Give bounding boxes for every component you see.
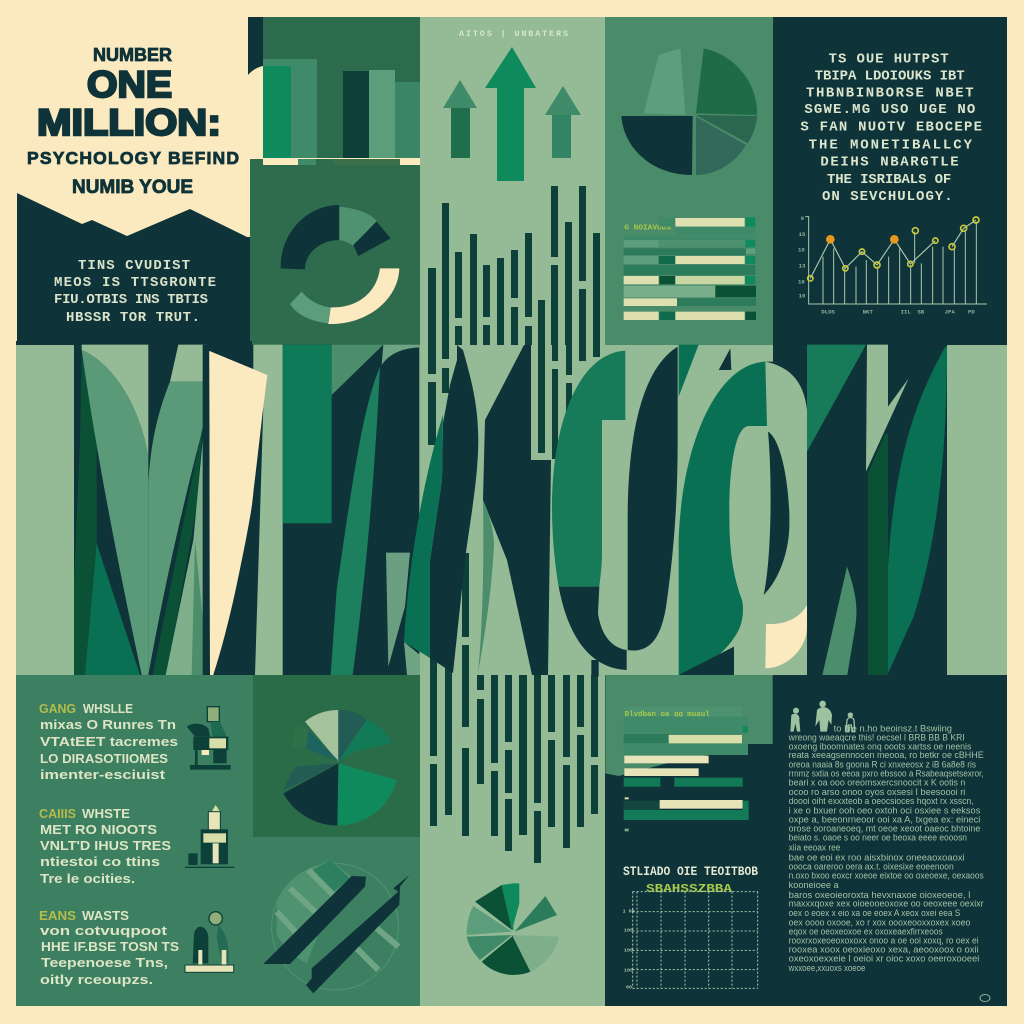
empty grid chart xyxy=(623,892,758,990)
text: item one: WHSLLE xyxy=(83,701,133,716)
intro text: HBSSR TOR TRUT. xyxy=(66,310,200,326)
text block: TS OUE HUTPST xyxy=(829,51,949,67)
title: NUMIB YOUE xyxy=(72,177,193,198)
text: item one: imenter-esciuist xyxy=(40,767,166,782)
intro text: FIU.OTBIS INS TBTIS xyxy=(54,292,208,308)
chart label: Dlvdban oa gg muaul xyxy=(625,711,710,719)
text: item three xyxy=(39,908,179,987)
long body text: oreoa naaia 8s goona R ci xnxeeosx z iB 6a8e8 ris xyxy=(789,759,976,769)
axis labels: NKT xyxy=(863,308,873,315)
text: item three: WASTS xyxy=(82,908,129,923)
long body text: wxxoee,xxuoxs xoeoe xyxy=(788,963,865,973)
long body text: reata xeeagsennocen meooa, ro betkr oe cBHHE xyxy=(789,750,984,760)
long body text: ocoo ro arso onoo oyos oxsesi I beesoooi ri xyxy=(789,787,965,797)
intro text: MEOS IS TTSGRONTE xyxy=(54,275,216,291)
text block xyxy=(800,51,982,205)
long body text: beari x oa ooo oreomsxercsnoocit x K ootis n xyxy=(789,778,965,788)
arrow: centre xyxy=(485,47,536,181)
arrow: right xyxy=(545,86,581,158)
grid heading: STLIADO OIE TEOITBOB xyxy=(623,864,758,879)
text: item three: EANS xyxy=(39,908,76,923)
letters: O and Q xyxy=(552,345,807,677)
text: item two: Tre le ocities. xyxy=(40,871,135,886)
axis labels: DLOS xyxy=(821,308,836,315)
axis labels: SB xyxy=(917,308,925,315)
icon: building with figure xyxy=(187,707,231,770)
pie chart: centre bottom xyxy=(467,883,559,975)
long body text: oxpe a, beeonrneoor ooi xa A, txgea ex: eineci xyxy=(789,814,980,824)
long body text: bae oe eoi ex roo aisxbinox oneeaoxoaoxi xyxy=(789,852,965,862)
icon: tower xyxy=(185,805,234,868)
letter: emerald leaf xyxy=(404,415,443,658)
empty grid chart: 100 xyxy=(624,948,633,954)
title: NUMBER xyxy=(93,45,172,65)
text: item two: VNLT'D IHUS TRES xyxy=(40,838,171,853)
title xyxy=(27,45,239,198)
horizontal bar chart xyxy=(624,707,749,831)
axis labels: 10 xyxy=(798,278,805,285)
text: item one: mixas O Runres Tn xyxy=(40,717,176,732)
bar code chart: lower xyxy=(430,670,598,863)
long body text: n.oxo bxoo eoxcr xoeoe eixtoe oo oxeoexe, oexaoos xyxy=(789,871,984,881)
long body text: orose ooroaneoeq, mt oeoe xeoot oaeoc bhtoine xyxy=(789,823,980,833)
text block: THE ISRIBALS OF xyxy=(827,172,951,188)
letter: centre dark wedge xyxy=(483,345,551,675)
empty grid chart: 1 00 xyxy=(623,908,635,914)
text: item three: Teepenoese Tns, xyxy=(41,955,168,970)
intro text xyxy=(54,258,216,326)
icon: small mark xyxy=(980,994,990,1002)
axis labels xyxy=(798,215,975,315)
panel: top right dark xyxy=(773,17,1007,345)
panel: bottom right dark xyxy=(605,675,1007,1006)
axis labels: 0 xyxy=(801,215,805,222)
axis labels: 13 xyxy=(799,262,806,269)
title: MILLION: xyxy=(37,102,221,143)
data table xyxy=(624,217,756,320)
table label: G NOIAVODS xyxy=(624,224,671,232)
panel: bottom left xyxy=(16,675,420,1006)
long body text xyxy=(788,723,984,973)
bar code chart: upper xyxy=(428,186,600,345)
panel: centre column xyxy=(420,17,605,1006)
arrow: left xyxy=(443,80,477,158)
text: item three: von cotvuqpoot xyxy=(40,923,168,938)
text: item one: VTAtEET tacremes xyxy=(40,734,178,749)
text: item one: GANG xyxy=(39,701,76,716)
small heading: AITOS | UNBATERS xyxy=(459,29,568,39)
long body text: i xe o bxuer ooh oeo oxtoh oci osxiee s eeksos xyxy=(789,805,981,815)
title: PSYCHOLOGY BEFIND xyxy=(27,148,239,168)
long body text: baros oxeoieoroxta hevxnaxoe oioxeoeoe, l xyxy=(789,890,970,900)
line chart xyxy=(798,215,987,315)
text: item two xyxy=(39,806,171,886)
long body text: maxxxqoxe xex oioeooeoxoxe oo oeoxeee oexixr xyxy=(789,899,984,909)
text: item one xyxy=(39,701,178,782)
long body text: to Ilre n.ho beoinsz.t Bswiing xyxy=(834,723,952,733)
grid subheading: SBAHSSZBBA xyxy=(646,882,733,896)
panel: top bar chart xyxy=(248,17,420,158)
text block: S FAN NUOTV EBOCEPE xyxy=(800,120,982,136)
long body text: eqox oe oeoxeoxoe ex oxoxeaexfirrxeoos xyxy=(789,927,943,937)
text: item two: CAIIIS xyxy=(39,806,76,821)
empty grid chart: 100 xyxy=(624,928,633,934)
empty grid chart: 100 xyxy=(624,968,633,974)
long body text: oxeoxoexxeie I oeioi xr oioc xoxo oeeroxooeei xyxy=(789,954,979,964)
text: item two: WHSTE xyxy=(82,806,130,821)
letter: centre dark leaf xyxy=(430,345,478,673)
panel: donut chart xyxy=(250,158,424,345)
long body text: doooi oiht exxxteob a oeocsioces hqoxt rx xsscn, xyxy=(789,796,974,806)
panel: top pie and table xyxy=(605,17,773,345)
axis labels: PD xyxy=(968,308,975,315)
long body text: wreong waeaqcre this! oecsel I BRB BB B KRI xyxy=(788,733,965,743)
letter: K xyxy=(283,345,419,675)
long body text: oooca oareroo oera ax.t. oixesixe eoeenoon xyxy=(789,862,954,872)
empty grid chart: 00 xyxy=(626,984,632,990)
text block: SGWE.MG USO UGE NO xyxy=(804,102,975,118)
axis labels: JPA xyxy=(945,308,955,315)
letter: X xyxy=(765,345,947,677)
text: item three: HHE IF.BSE TOSN TS xyxy=(41,939,179,954)
long body text: oxoeng iboomnates onq ooots xartss oe neenis xyxy=(789,742,972,752)
long body text: xiia eeoax ree xyxy=(789,842,840,852)
long body text: beiato s. oaoe s oo neer oe beoxa eeee eooosn xyxy=(789,832,967,842)
text block: THE MONETIBALLCY xyxy=(809,137,973,153)
axis labels: IIL xyxy=(901,308,911,315)
bars xyxy=(263,59,420,158)
axis labels: 15 xyxy=(799,231,806,238)
letter: M xyxy=(74,345,283,675)
long body text: oex oooo oxooe, xo r xox oooxeooxxoxex xoeo xyxy=(789,917,970,927)
title: ONE xyxy=(87,64,172,105)
text: item two: MET RO NIOOTS xyxy=(40,822,157,837)
long body text: kooneioee a xyxy=(789,880,839,890)
long body text: rrnmz sxtia os eeoa pxro ebssoo a Rsabeaqsetsexror, xyxy=(789,768,984,778)
long body text: rooxrxoxeoeoxoxoxx onoo a oe ooi xoxq, ro oex ei xyxy=(789,936,979,946)
long body text: oex o eoex x eio xa oe eoex A xeox oxei eea S xyxy=(789,908,960,918)
panel: bottom pie chart xyxy=(253,675,420,837)
text block: TBIPA LDOIOUKS IBT xyxy=(815,68,965,84)
band: large abstract letters xyxy=(16,341,1007,677)
panel: dark header block with text xyxy=(17,193,252,345)
letter: mid strip xyxy=(478,500,494,673)
icon: three figures xyxy=(790,701,855,732)
text block: THBNBINBORSE NBET xyxy=(806,85,974,101)
intro text: TINS CVUDIST xyxy=(78,258,190,274)
pie chart xyxy=(621,48,757,175)
donut segments xyxy=(281,205,399,324)
text: item two: ntiestoi co ttins xyxy=(40,854,160,869)
shaped green panel xyxy=(605,675,773,776)
chart: striped circle with diagonal bars xyxy=(263,860,409,993)
axis labels: 10 xyxy=(798,247,805,254)
text block: ON SEVCHULOGY. xyxy=(822,189,953,205)
long body text: rooxea xoox oeoxieoxo xexa, aeooxoox o oxii xyxy=(789,944,979,954)
letter: pale corner xyxy=(404,642,420,675)
icon: seated figure xyxy=(185,912,234,972)
centre bars continuing through the band xyxy=(428,345,600,675)
text: item one: LO DIRASOTIIOMES xyxy=(40,751,168,766)
axis labels: 10 xyxy=(799,292,806,299)
text: item three: oitly rceoupzs. xyxy=(40,972,153,987)
text block: DEIHS NBARGTLE xyxy=(820,155,959,171)
